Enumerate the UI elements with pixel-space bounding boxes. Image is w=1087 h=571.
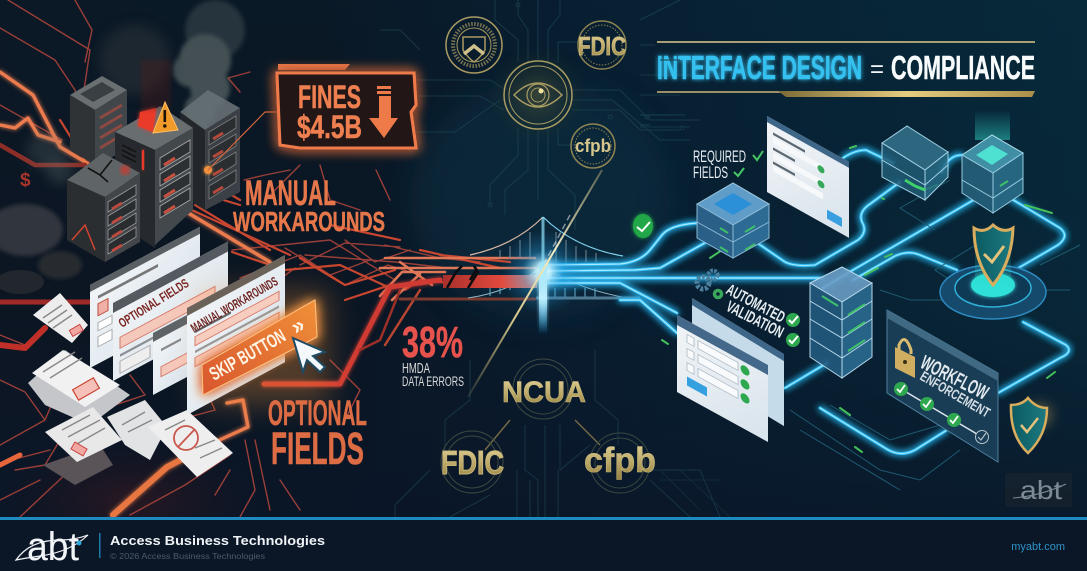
server: center stack [810,267,872,378]
panel: workflow enforcement [887,310,998,462]
burst of light at bridge tower [468,170,602,397]
icon: down arrow [369,86,398,138]
seal: eye [488,45,588,145]
skip button: SKIP BUTTON [206,326,290,385]
scattered paper documents [28,293,233,485]
icons: dollar signs: $ [20,170,31,191]
stat: 38% HMDA data errors: DATA ERRORS [402,373,464,389]
footer logo: abt [27,525,79,569]
label: optional fields: OPTIONAL [268,394,367,433]
server: teal node [962,110,1023,213]
form window: required fields [767,116,849,238]
callout: fines [277,64,416,148]
form window: automated validation front [677,315,768,442]
bridge [443,217,640,298]
label: manual workarounds: WORKAROUNDS [233,206,385,237]
logo: NCUA: NCUA [502,376,586,409]
smoke [0,0,245,294]
icon: warning triangle [153,102,178,133]
watermark logo [1005,473,1072,507]
browser window: optional fields: OPTIONAL FIELDS [116,275,192,331]
seal: treasury [446,17,502,73]
label: required fields: FIELDS [693,164,728,182]
watermark logo: abt [1020,475,1063,505]
footer [0,517,1087,571]
glowing blue data lines from bridge [548,223,823,333]
platform with glowing ring [940,225,1046,319]
title: = [870,56,884,83]
icon: gears [697,270,722,298]
server rack: back right [180,90,240,210]
thin network traces [640,60,1080,490]
seal: cfpb top: cfpb [575,136,611,156]
stat: 38% HMDA data errors [402,318,464,389]
icon: small shield [1011,398,1052,453]
icons: dollar signs: $ [285,127,293,142]
logo: NCUA [502,359,586,419]
logo: cfpb bottom [584,433,656,493]
label: optional fields [268,394,367,474]
label: required fields: REQUIRED [693,148,746,166]
red cracked network [0,0,535,517]
label: automated validation: VALIDATION [723,298,786,342]
label: automated validation [723,282,788,342]
icon: cursor [293,338,325,372]
browser window: manual workarounds with skip button: MANUAL WORKAROUNDS [188,274,281,336]
label: manual workarounds [233,174,385,237]
footer: myabt.com [1011,541,1065,553]
logo: FDIC bottom: FDIC [441,444,504,481]
icon: prohibited stamp [174,426,198,450]
footer: Access Business Technologies [110,533,325,548]
logo: cfpb bottom: cfpb [584,441,656,480]
footer: © 2026 Access Business Technologies [110,552,265,561]
server: first node [697,183,769,258]
title [657,41,1035,97]
seal: FDIC top [578,21,626,69]
label: required fields [693,148,763,182]
circuit traces: bottom regulators [395,350,730,517]
callout: fines: $4.5B [297,109,362,145]
icons: dollar signs [20,126,408,191]
logo: FDIC bottom [441,431,504,493]
secure network paths [753,150,1069,454]
panel: workflow enforcement: ENFORCEMENT [918,368,993,421]
browser window: small middle [153,309,198,395]
label: automated validation: AUTOMATED [723,282,788,327]
seal: cfpb top [571,124,615,168]
server rack: front cracked [67,153,140,262]
circuit traces: top regulators [380,0,700,230]
skip button: » [286,312,309,339]
stat: 38% HMDA data errors: 38% [402,318,463,367]
server rack: center with warning [115,60,212,248]
label: manual workarounds: MANUAL [245,174,336,213]
server: glass node [882,126,948,200]
icons: validation checks [786,313,800,347]
icons: dollar signs: $ [400,126,408,141]
seal: FDIC top: FDIC [578,31,626,61]
label: optional fields: FIELDS [271,423,364,474]
browser window: back [90,227,200,368]
callout: fines: FINES [298,79,361,115]
browser window: optional fields [113,241,228,381]
browser window: manual workarounds with skip button [187,255,330,415]
icon: padlock [895,340,915,378]
title: INTERFACE DESIGN [657,50,862,87]
panel: workflow enforcement: WORKFLOW [917,352,992,405]
icon: large shield [974,225,1013,285]
server rack: back left [70,76,127,165]
icon: green check badge [633,214,653,238]
form window: automated validation back [692,298,784,426]
stat: 38% HMDA data errors: HMDA [402,360,430,377]
connector from fines callout [208,112,277,170]
small green signal dashes [662,146,1055,452]
